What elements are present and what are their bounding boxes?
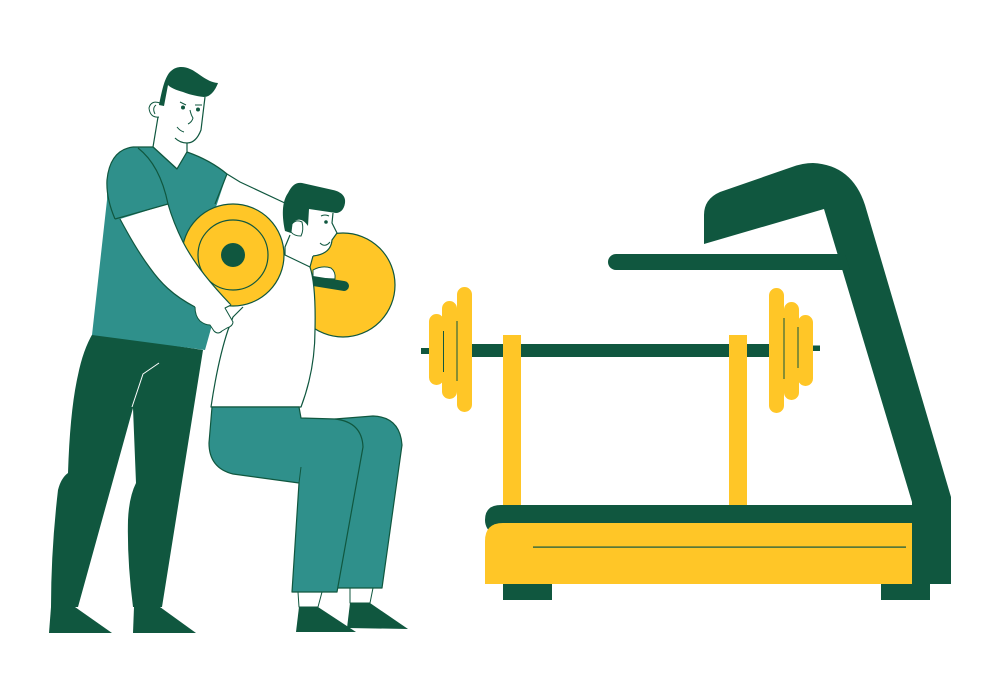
sleeve seam [138,148,168,204]
ear [291,221,303,236]
seated man [209,183,408,632]
shoes [49,607,196,633]
treadmill with barbell [421,163,951,600]
deck line [533,546,906,548]
ankles [298,588,373,607]
facial features [177,102,202,132]
bar behind neck [313,281,344,286]
standing trainer [49,67,284,633]
pocket line [132,363,159,407]
neck [153,112,187,169]
treadmill feet [503,584,930,600]
torso outline [211,235,315,407]
treadmill handrail [608,254,850,270]
front weight plate [182,204,284,306]
shoes [296,603,408,632]
face outline [313,213,337,256]
hair [159,67,218,106]
eye and mouth [320,215,330,245]
treadmill deck [485,523,912,584]
shirt [92,147,227,350]
arm outline [115,204,231,307]
treadmill frame and console [704,163,951,584]
knee crease [299,467,301,483]
left weight plates [429,287,472,412]
arm outline of trainer behind seated man [227,174,287,204]
front arm [120,204,231,308]
torso fill [211,232,315,407]
barbell support posts [503,335,747,507]
face [158,88,205,143]
trousers [51,333,203,607]
back leg [335,416,402,588]
treadmill belt [485,505,912,535]
face [292,209,337,256]
ear [149,102,160,117]
back weight plate [291,233,395,337]
hand on bar [313,267,335,279]
hand [195,296,233,333]
barbell bar [421,344,820,357]
hand outline [195,305,233,333]
hair [283,183,345,233]
face outline [175,97,205,143]
front leg and hips [209,407,363,592]
shirt collar and shoulder outline [107,147,227,219]
right weight plates [769,288,813,413]
neck outline [153,117,187,169]
